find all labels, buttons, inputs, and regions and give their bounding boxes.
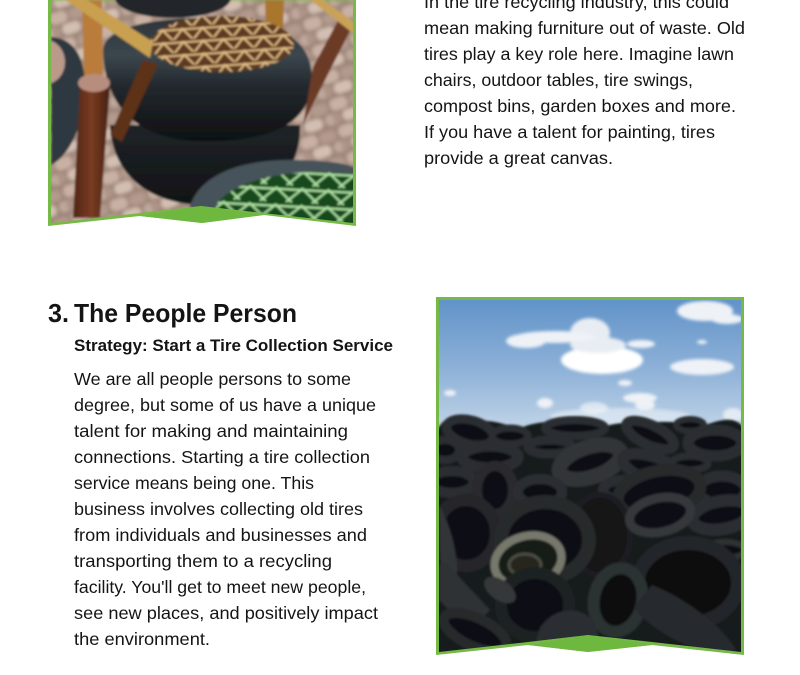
text block: people person description: We are all people persons to some (74, 369, 351, 389)
text block: furniture from waste: If you have a talent for painting, tires (424, 122, 715, 142)
photo content (430, 297, 754, 660)
text block: people person description: business involves collecting old tires (74, 499, 363, 519)
text block: furniture from waste: mean making furniture out of waste. Old (424, 18, 745, 38)
text block: furniture from waste: tires play a key role here. Imagine lawn (424, 44, 734, 64)
clouds (444, 301, 743, 424)
text block: people person description: talent for making and maintaining (74, 421, 348, 441)
photo frame (48, 0, 356, 226)
text block: furniture from waste: compost bins, garden boxes and more. (424, 96, 736, 116)
text block: people person description: the environment. (74, 629, 210, 649)
text block: people person description: facility. You'll get to meet new people, (74, 577, 366, 597)
heading: 3. The People Person: 3. (48, 298, 69, 328)
photo frame (436, 297, 744, 655)
text block: people person description: degree, but some of us have a unique (74, 395, 376, 415)
tire pile (430, 414, 754, 660)
text block: people person description: from individuals and businesses and (74, 525, 367, 545)
text block: furniture from waste (424, 0, 745, 168)
text block: people person description: transporting them to a recycling (74, 551, 332, 571)
text block: furniture from waste: chairs, outdoor tables, tire swings, (424, 70, 693, 90)
notch accent (528, 635, 652, 652)
heading: 3. The People Person: The People Person (74, 298, 297, 328)
photo content (27, 0, 356, 226)
text block: people person description: connections. Starting a tire collection (74, 447, 370, 467)
notch accent (140, 206, 264, 223)
text block: people person description (74, 369, 378, 649)
photo: tire chairs with woven seats (27, 0, 356, 226)
subheading: strategy: Strategy: Start a Tire Collection Service (74, 336, 393, 355)
photo: pile of old tires under blue sky (430, 297, 754, 660)
text block: people person description: service means being one. This (74, 473, 314, 493)
text block: people person description: see new places, and positively impact (74, 603, 378, 623)
text block: furniture from waste: provide a great canvas. (424, 148, 613, 168)
